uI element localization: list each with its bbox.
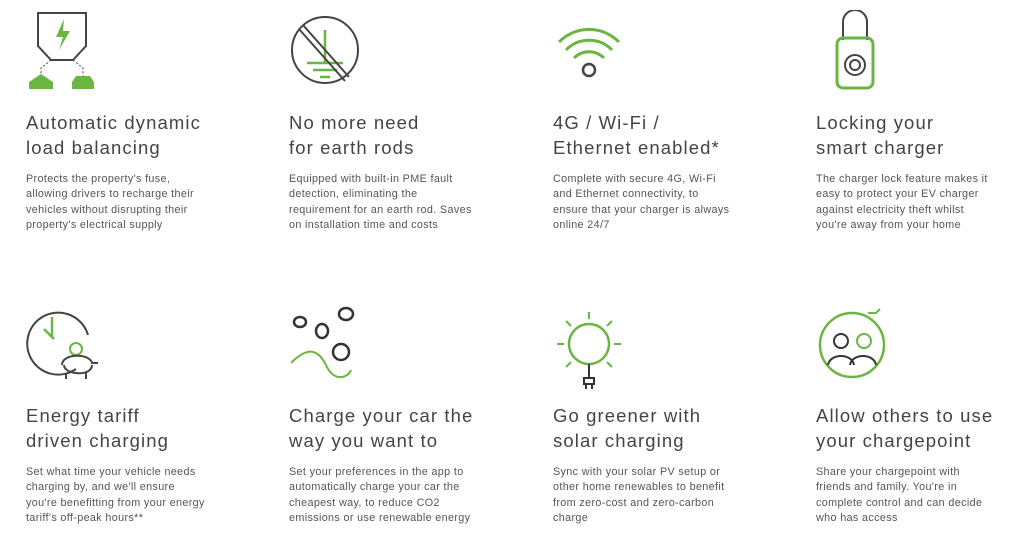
icon: no earth rod	[291, 16, 359, 84]
icon: people	[818, 308, 886, 378]
text: you're away from your home	[816, 219, 961, 231]
text	[816, 173, 988, 231]
text: against electricity theft whilst	[816, 204, 964, 216]
icon: coins wave	[290, 306, 354, 378]
heading	[816, 405, 993, 451]
text: The charger lock feature makes it	[816, 173, 988, 185]
text	[289, 466, 470, 524]
text: requirement for an earth rod. Saves	[289, 204, 472, 216]
heading: 4G / Wi-Fi /	[553, 112, 660, 133]
heading	[553, 112, 720, 158]
text: from zero-cost and zero-carbon	[553, 497, 714, 509]
heading: No more need	[289, 112, 419, 133]
heading	[26, 112, 201, 158]
panel: tariff	[26, 312, 205, 524]
panel: charge your way	[289, 306, 473, 524]
text: vehicles without disrupting their	[26, 204, 188, 216]
heading: Allow others to use	[816, 405, 993, 426]
text	[816, 466, 982, 524]
heading: driven charging	[26, 430, 169, 451]
heading	[289, 112, 419, 158]
heading: solar charging	[553, 430, 685, 451]
panel: connectivity	[553, 28, 729, 231]
text	[26, 466, 205, 524]
heading: Ethernet enabled*	[553, 137, 720, 158]
text: tariff's off-peak hours**	[26, 512, 143, 524]
icon: lock charger	[836, 10, 874, 90]
heading: smart charger	[816, 137, 944, 158]
text: Sync with your solar PV setup or	[553, 466, 720, 478]
text: other home renewables to benefit	[553, 481, 724, 493]
text: allowing drivers to recharge their	[26, 188, 194, 200]
panel: earth rods	[289, 16, 472, 231]
heading: way you want to	[289, 430, 438, 451]
text: emissions or use renewable energy	[289, 512, 470, 524]
panel: locking	[816, 10, 988, 231]
text: Complete with secure 4G, Wi-Fi	[553, 173, 716, 185]
heading: Charge your car the	[289, 405, 473, 426]
heading	[553, 405, 701, 451]
text: easy to protect your EV charger	[816, 188, 979, 200]
heading	[26, 405, 169, 451]
text: online 24/7	[553, 219, 610, 231]
text: cheapest way, to reduce CO2	[289, 497, 440, 509]
heading: Locking your	[816, 112, 934, 133]
text: automatically charge your car the	[289, 481, 460, 493]
heading: your chargepoint	[816, 430, 971, 451]
text: charge	[553, 512, 588, 524]
text	[553, 173, 729, 231]
heading: load balancing	[26, 137, 161, 158]
heading: Automatic dynamic	[26, 112, 201, 133]
icon: fuse house car	[29, 12, 94, 89]
heading: Energy tariff	[26, 405, 140, 426]
icon: wifi	[558, 28, 620, 78]
text	[26, 173, 194, 231]
text: property's electrical supply	[26, 219, 163, 231]
text: Equipped with built-in PME fault	[289, 173, 453, 185]
heading	[289, 405, 473, 451]
text	[289, 173, 472, 231]
text	[553, 466, 724, 524]
text: who has access	[816, 512, 898, 524]
text: you're benefitting from your energy	[26, 497, 205, 509]
text: Protects the property's fuse,	[26, 173, 170, 185]
text: Set your preferences in the app to	[289, 466, 464, 478]
icon: clock piggy	[26, 312, 98, 379]
text: friends and family. You're in	[816, 481, 957, 493]
icon: sun plug	[557, 312, 621, 389]
text: on installation time and costs	[289, 219, 438, 231]
heading: for earth rods	[289, 137, 414, 158]
panel: share	[816, 308, 993, 524]
panel: solar	[553, 312, 724, 524]
text: complete control and can decide	[816, 497, 982, 509]
text: Set what time your vehicle needs	[26, 466, 196, 478]
text: ensure that your charger is always	[553, 204, 729, 216]
text: detection, eliminating the	[289, 188, 418, 200]
text: Share your chargepoint with	[816, 466, 960, 478]
text: charging by, and we'll ensure	[26, 481, 175, 493]
text: and Ethernet connectivity, to	[553, 188, 699, 200]
heading: Go greener with	[553, 405, 701, 426]
panel: load balancing	[26, 12, 201, 231]
heading	[816, 112, 944, 158]
